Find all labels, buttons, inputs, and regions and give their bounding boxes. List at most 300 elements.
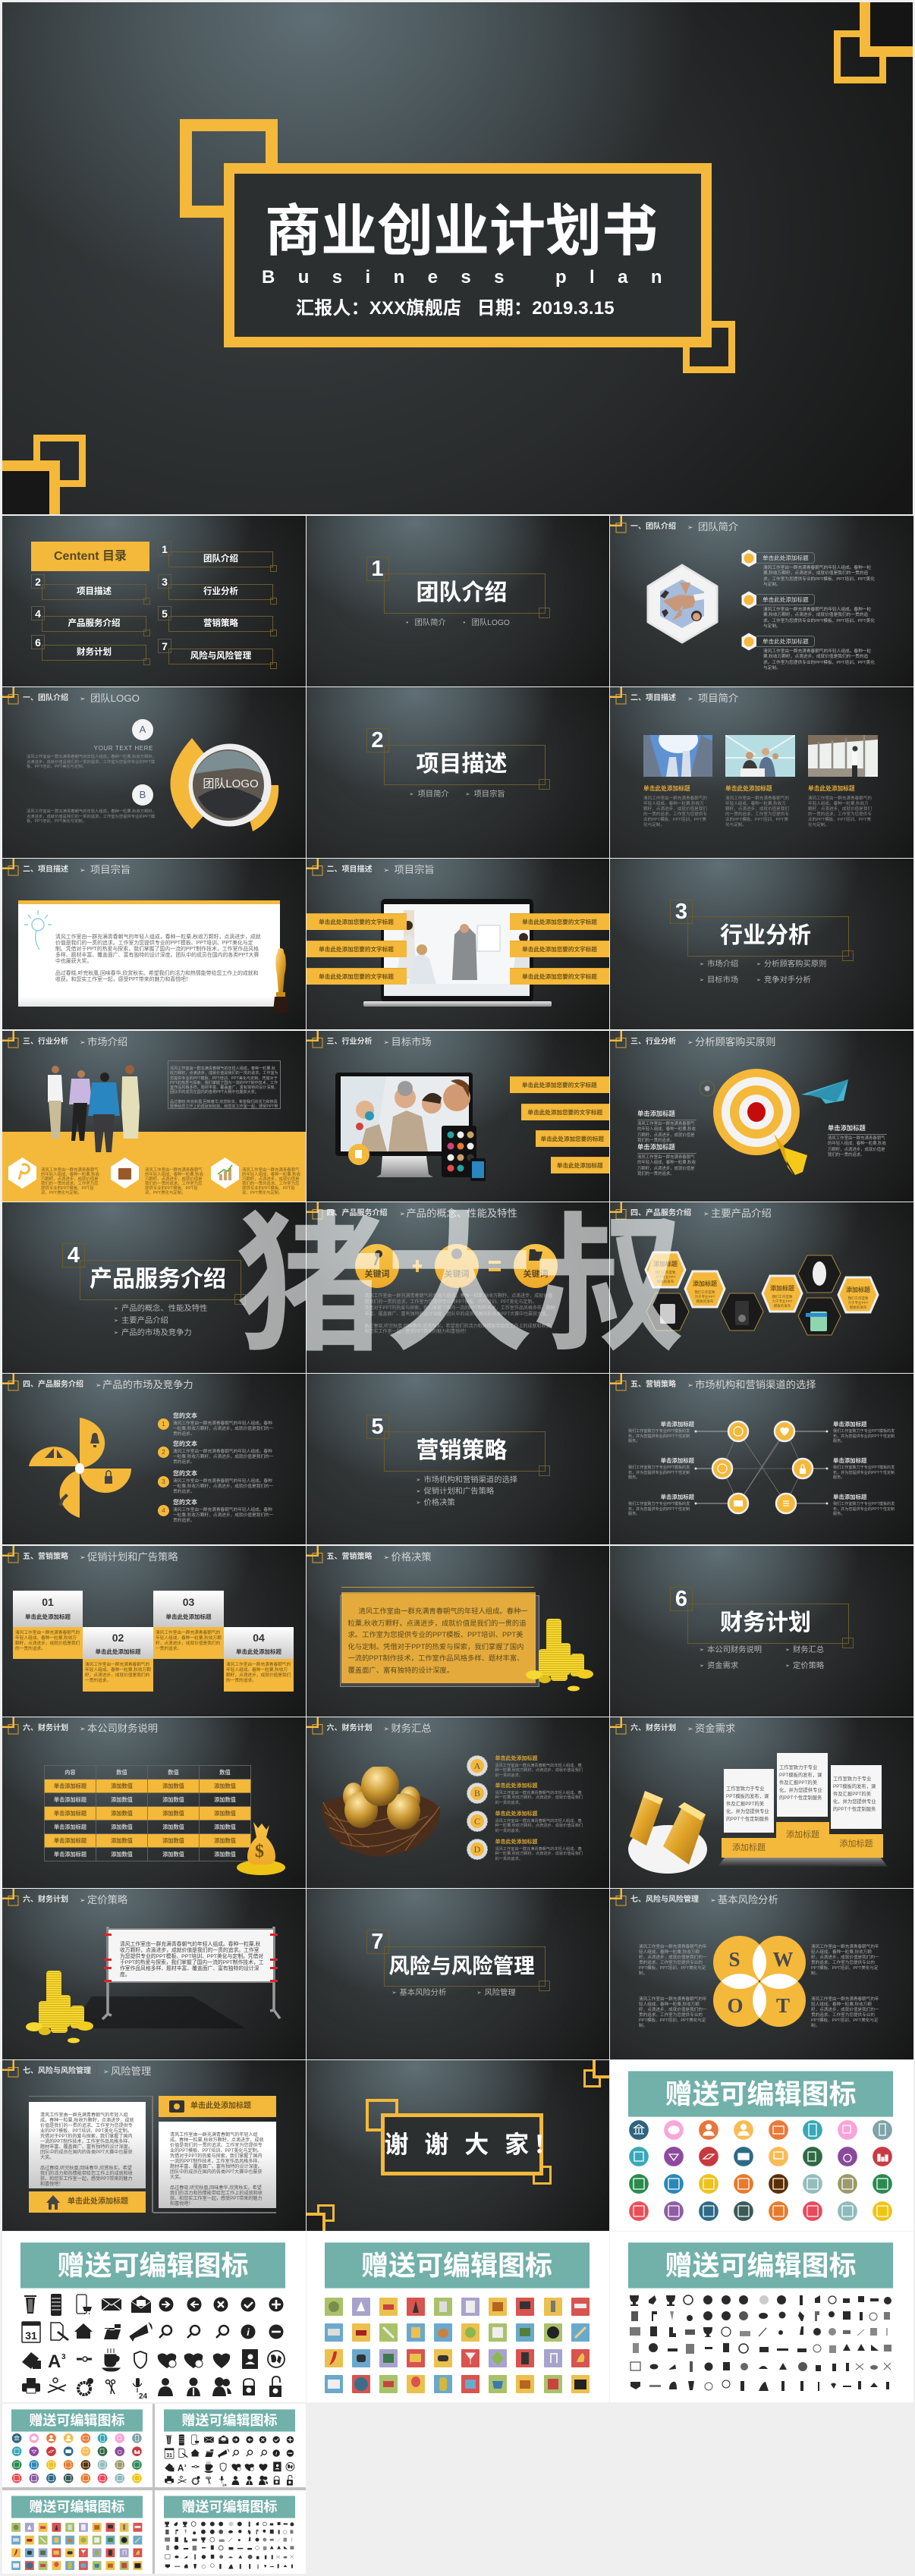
step 01: 01: [42, 1596, 54, 1608]
header: 二、项目描述: [326, 865, 372, 874]
text block A: 清风工作室由一群充满青春朝气的年轻人组成，春种一粒粟,秋收万颗籽，点滴进步，成就价值是我们的一贯的追求。工作室为您提供专业的PPT模板、PPT培训、PPT美化与定制。: [27, 755, 156, 769]
slide: section 7: ➢: [476, 1990, 481, 1996]
section item: 产品的市场及竞争力: [121, 1329, 192, 1337]
section number: 1: [371, 557, 384, 581]
label left 3: [628, 1494, 694, 1515]
podium right: [829, 1834, 883, 1858]
contents item 4: 产品服务介绍: [68, 619, 120, 628]
header: ➢: [687, 695, 693, 702]
header: 价格决策: [391, 1551, 432, 1563]
round icon grid: [610, 2060, 913, 2231]
header: 风险管理: [111, 2066, 151, 2077]
header: 七、风险与风险管理: [630, 1896, 699, 1904]
network diagram: [693, 1415, 838, 1518]
section item: 项目简介: [417, 790, 449, 799]
icon hexagon 3: [211, 1158, 239, 1189]
step 03: [153, 1591, 224, 1659]
slide: section 1: [307, 516, 609, 686]
text block right: [828, 1124, 888, 1154]
slide: swot: [610, 1889, 913, 2059]
contents item 6: [31, 635, 150, 665]
english subtitle: Business plan: [262, 267, 685, 287]
column 3: 清风工作室由一群充满青春朝气的年轻人组成。春种一粒粟,秋收万颗籽，点滴进步，成就价值是我们的一贯的追求。工作室为您提供专业的PPT模板、PPT培训、PPT美化与定制。: [808, 796, 872, 828]
header: 六、财务计划: [630, 1724, 676, 1733]
section corner square: [539, 1465, 549, 1476]
banner: 赠送可编辑图标: [182, 2413, 278, 2428]
label bar left 1: 单击此处添加您要的文字标题: [319, 919, 394, 925]
tagline: YOUR TEXT HERE: [94, 745, 153, 752]
item 3: [742, 633, 875, 671]
section number: [366, 557, 388, 581]
item 1: 单击此处添加标题: [762, 554, 809, 561]
finance table: 数值: [116, 1769, 127, 1775]
header: [307, 1202, 504, 1222]
section item: 本公司财务说明: [707, 1646, 762, 1654]
header: [610, 516, 738, 533]
decorative frame: back square: [180, 119, 278, 218]
item C: [466, 1811, 587, 1838]
label bar right 2: 单击此处添加您要的文字标题: [522, 946, 597, 953]
label bar right 3: [510, 968, 610, 985]
slide: section 6: [610, 1546, 913, 1716]
section frame: [687, 1604, 849, 1644]
slide: contents: [2, 516, 305, 686]
left yellow title: 单击此处添加标题: [68, 2197, 128, 2206]
item 1: [742, 549, 875, 587]
item 3: 3: [162, 1478, 165, 1485]
photo: meeting: [725, 735, 795, 777]
header: [2, 1546, 200, 1566]
text block right: 清风工作室由一群充满青春朝气的年轻人组成，春种一粒粟,秋收万颗籽，点滴进步，成就价值是我们的一贯的追求。: [828, 1136, 886, 1158]
item D: 单击此处添加标题: [495, 1839, 537, 1845]
item 2: 您的文本: [173, 1440, 197, 1447]
S text: 清风工作室由一群充满青春朝气的年轻人组成。春种一粒粟,秋收万颗籽，点滴进步，成就价值是我们的一贯的追求。工作室为您提供专业的PPT模板、PPT培训、PPT美化与定制。: [639, 1945, 707, 1976]
label left 2: [628, 1457, 694, 1478]
header: 分析顾客购买原则: [695, 1036, 775, 1048]
hexagon product grid: 我们工作室致: [656, 1270, 676, 1275]
label bar 3: 单击此处添加您要的标题: [540, 1136, 604, 1142]
right yellow title: [159, 2096, 276, 2117]
section item: 资金需求: [707, 1662, 738, 1670]
step 01: 清风工作室由一群充满青春朝气的年轻人组成。春种一粒粟,秋收万颗籽，点滴进步，成就价值是我们的一贯的追求。: [15, 1631, 80, 1651]
paper 1: 工作室致力于专业PPT模板的发布，课件及汇报PPT的美化，并为您提供专业的PPT个性定制服务: [726, 1786, 769, 1822]
hexagon product grid: 模板的发布: [774, 1303, 791, 1308]
finance table: 单击添加标题: [54, 1851, 86, 1857]
step 03: 03: [183, 1596, 194, 1608]
section number: [670, 900, 693, 924]
logo circle with crescents: [165, 733, 283, 835]
contents item 1: 1: [162, 543, 168, 555]
item A: [466, 1755, 587, 1783]
banner: [628, 2071, 893, 2117]
slide: square icons: [307, 2232, 609, 2402]
header: ➢: [80, 1896, 86, 1904]
section number: [366, 1415, 388, 1439]
slide: thank you: [307, 2060, 609, 2230]
step 02: [83, 1627, 153, 1692]
hexagon product grid: 我们工作室致: [848, 1296, 869, 1301]
header: 二、项目描述: [23, 865, 68, 874]
section frame: [687, 916, 849, 957]
slide: sport icons: [610, 2232, 913, 2402]
badge B: [132, 784, 153, 806]
keyword equation: 关键词: [444, 1268, 469, 1279]
paper 3: 工作室致力于专业PPT模板的发布，课件及汇报PPT的美化，并为您提供专业的PPT个性定制服务: [833, 1776, 876, 1812]
finance table: 单击添加标题: [54, 1824, 86, 1830]
header: [610, 1889, 807, 1908]
section number: 3: [675, 900, 687, 924]
step 01: [13, 1591, 83, 1659]
item C: C: [473, 1816, 480, 1827]
label bar 1: [510, 1076, 609, 1093]
section title: 团队介绍: [416, 580, 507, 605]
contents heading: Centent 目录: [54, 550, 127, 563]
slide: section 4: ➢: [114, 1330, 118, 1336]
header: ➢: [399, 1210, 405, 1217]
slide: section 5: ➢: [416, 1478, 420, 1483]
finance table: 添加数值: [111, 1810, 133, 1816]
sport icon grid: [610, 2232, 913, 2402]
header: 一、团队介绍: [630, 523, 676, 531]
finance table: 添加数值: [111, 1796, 133, 1802]
label bar 4: [551, 1157, 609, 1173]
step 02: 单击此处添加标题: [96, 1648, 141, 1655]
header: [610, 1717, 807, 1737]
header: ➢: [703, 1210, 709, 1217]
step 04: 04: [253, 1632, 265, 1644]
header: 五、营销策略: [630, 1381, 676, 1389]
header: [307, 859, 504, 878]
caption 1: 清风工作室由一群充满青春朝气的年轻人组成，春种一粒粟,秋收万颗籽，点滴进步，成就价值是我们的一贯的追求。工作室为您提供专业的PPT模板、PPT培训、PPT美化与定制。: [41, 1168, 99, 1195]
swot diagram: [709, 1930, 811, 2033]
hexagon team photo: [646, 564, 718, 643]
header: [2, 859, 200, 878]
section item: 项目宗旨: [473, 790, 505, 799]
contents item 5: 营销策略: [203, 619, 238, 628]
slide: project purpose text: [2, 859, 305, 1029]
finance table: 添加数值: [162, 1783, 184, 1789]
banner: 赠送可编辑图标: [29, 2499, 124, 2515]
section item: 定价策略: [793, 1662, 824, 1670]
swot diagram: O: [727, 1994, 744, 2017]
section corner square: [539, 1981, 549, 1991]
label bar 3: [536, 1130, 609, 1147]
header: [307, 1717, 504, 1737]
icon hexagon 1: [8, 1158, 36, 1189]
section item: 团队简介: [414, 619, 446, 627]
bracket line lower: [153, 2212, 276, 2213]
step 02: 清风工作室由一群充满青春朝气的年轻人组成。春种一粒粟,秋收万颗籽，点滴进步，成就价值是我们的一贯的追求。: [85, 1663, 151, 1683]
contents item 7: 风险与风险管理: [190, 652, 251, 661]
contents item 1: [158, 542, 277, 572]
finance table: 添加数值: [162, 1837, 184, 1843]
section item: 财务汇总: [793, 1646, 824, 1654]
keyword equation: 关键词: [364, 1268, 389, 1279]
section number: 2: [371, 728, 384, 752]
section item: 团队LOGO: [472, 619, 510, 627]
section title: 财务计划: [720, 1610, 811, 1635]
bulb icon: [24, 910, 52, 951]
header: 四、产品服务介绍: [630, 1209, 691, 1217]
paper 2: [777, 1753, 828, 1817]
slide: section 6: ➢: [700, 1648, 704, 1653]
header: [610, 1202, 807, 1222]
top right corner bracket: [860, 0, 913, 57]
section number: [366, 728, 388, 752]
keyword equation: 关键词: [523, 1268, 548, 1279]
corner square bottom left: [317, 2204, 334, 2222]
header: ➢: [80, 695, 86, 702]
hexagon product grid: 模板的发布: [657, 1279, 674, 1284]
contents item 3: [158, 574, 277, 605]
finance table: 添加数值: [111, 1824, 133, 1830]
contents item 2: 2: [35, 576, 41, 588]
header: 一、团队介绍: [23, 694, 68, 702]
item 2: 清风工作室由一群充满青春朝气的年轻人组成。春种一粒粟,秋收万颗籽，点滴进步，成就价值是我们的一贯的追求。工作室为您提供专业的PPT模板、PPT培训、PPT美化与定制。: [763, 608, 875, 629]
small panel: black icons: [155, 2404, 305, 2487]
slide: section 6: ➢: [700, 1663, 704, 1669]
cover slide: [2, 2, 913, 514]
finance table: 添加数值: [214, 1810, 236, 1816]
text block left 1: [637, 1110, 698, 1140]
left yellow title: [29, 2191, 146, 2213]
header: 四、产品服务介绍: [326, 1209, 387, 1217]
column 3: [808, 785, 878, 831]
hexagon product grid: 模板的发布: [696, 1299, 714, 1304]
header: ➢: [687, 523, 693, 531]
label left 1: 我们工作室致力于专业PPT模板的发布，并为您提供专业的PPT个性定制服务。: [628, 1429, 690, 1444]
hexagon product grid: 我们工作室致: [772, 1294, 793, 1299]
slide: section 2: [307, 687, 609, 857]
section number: [62, 1243, 85, 1268]
header: [307, 1031, 504, 1051]
slide: pricing decision: [307, 1546, 609, 1716]
text box: 清风工作室由一群充满青春朝气的年轻人组成，春种一粒粟,秋收万颗籽，点滴进步，成就价值是我们的一贯的追求。工作室为您提供专业的PPT模板、PPT培训、PPT美化与定制。凭借对于PPT的热爱与探索，我们掌握了国内一流的PPT制作技术，工作室作品风格多样、题材丰富、覆盖面广、富有独特的设计深度。团队中的成员在国内的各类PPT大赛中也屡获大奖。: [170, 1067, 278, 1095]
text block left 1: 单击添加标题: [637, 1110, 675, 1117]
corner square top right: [583, 2069, 601, 2088]
header: 资金需求: [695, 1723, 735, 1734]
left text card: 品过春晓,听完秋凰,回味春华,欣赏秋实。希望我们的活力和热情能带给您工作上的成就和收获。和您实工作室一起，感受PPT带来的魅力和喜悦吧！: [40, 2166, 133, 2187]
item A: A: [473, 1761, 480, 1771]
thank you frame: [381, 2113, 543, 2175]
contents item 6: 财务计划: [77, 648, 112, 657]
monitor with photo and devices: [334, 1071, 489, 1183]
text box: [168, 1060, 281, 1109]
people illustration: [44, 1064, 140, 1155]
contents item 5: 5: [162, 608, 168, 620]
text block left 2: 清风工作室由一群充满青春朝气的年轻人组成，春种一粒粟,秋收万颗籽，点滴进步，成就价值是我们的一贯的追求。: [637, 1155, 696, 1176]
small panel: sport icons: [155, 2490, 305, 2574]
slide: project purpose laptop: [307, 859, 609, 1029]
contents item 6: 6: [35, 636, 41, 649]
badge A: [132, 719, 153, 740]
header: 七、风险与风险管理: [23, 2067, 91, 2075]
small panel: round icons: [2, 2404, 152, 2487]
section frame: [384, 573, 545, 614]
finance table: 内容: [64, 1769, 76, 1775]
finance table: 单击添加标题: [54, 1783, 86, 1789]
header: ➢: [687, 1038, 693, 1046]
section item: 促销计划和广告策略: [423, 1487, 494, 1496]
item 2: [742, 592, 875, 629]
badge A: A: [140, 724, 146, 735]
W text: 清风工作室由一群充满青春朝气的年轻人组成。春种一粒粟,秋收万颗籽，点滴进步，成就价值是我们的一贯的追求。工作室为您提供专业的PPT模板、PPT培训、PPT美化与定制。: [811, 1945, 879, 1976]
item C: 清风工作室由一群充满青春朝气的年轻人组成。春种一粒粟,秋收万颗籽，点滴进步，成就价值是我们的一贯的追求。: [495, 1819, 583, 1833]
header: ➢: [80, 866, 86, 874]
slide: section 7: ➢: [391, 1990, 396, 1996]
column 3: 单击此处添加标题: [808, 785, 855, 792]
finance table: 添加数值: [214, 1851, 236, 1857]
item 2: 单击此处添加标题: [762, 596, 809, 603]
section number: 7: [371, 1930, 384, 1954]
item A: 单击此处添加标题: [495, 1756, 537, 1761]
label bar 2: [520, 1104, 609, 1120]
keyword equation: [352, 1240, 564, 1292]
section corner square: [842, 1638, 854, 1648]
label bar right 3: 单击此处添加您要的文字标题: [522, 973, 597, 980]
header: 六、财务计划: [23, 1724, 68, 1733]
label bar 2: 单击此处添加您要的文字标题: [527, 1109, 602, 1116]
header: [610, 1374, 807, 1393]
label bar left 3: [307, 968, 407, 985]
slide: main products: [610, 1202, 913, 1373]
item B: B: [473, 1788, 480, 1798]
item 1: 清风工作室由一群充满青春朝气的年轻人组成。春种一粒粟,秋收万颗籽，点滴进步，成就价值是我们的一贯的追求。工作室为您提供专业的PPT模板、PPT培训、PPT美化与定制。: [763, 566, 875, 587]
label right 3: 单击添加标题: [833, 1494, 866, 1500]
section item: 风险管理: [484, 1989, 516, 1997]
slide: section 7: [307, 1889, 609, 2059]
back square: [366, 2099, 398, 2131]
label right 2: [833, 1457, 899, 1478]
slide: section 3: ➢: [700, 962, 704, 967]
left text card: 清风工作室由一群充满青春朝气的年轻人组成。春种一粒粟,秋收万颗籽，点滴进步，成就价值是我们的一贯的追求。工作室为您提供专业的PPT模板、PPT培训、PPT美化与定制。凭借对于PPT的热爱与探索，我们掌握了国内一流的PPT制作技术，工作室作品风格多样、题材丰富、覆盖面广、富有独特的设计深度。团队中的成员在国内的各类PPT大赛中也屡获大奖。: [40, 2113, 134, 2160]
text block right: 单击添加标题: [828, 1124, 866, 1132]
hexagon product grid: 添加标题: [653, 1260, 678, 1268]
header: 项目宗旨: [395, 864, 435, 875]
target with darts: [697, 1067, 853, 1177]
contents heading: [31, 542, 149, 571]
item C: 单击此处添加标题: [495, 1811, 537, 1817]
header: ➢: [384, 1725, 389, 1733]
label right 2: 我们工作室致力于专业PPT模板的发布，并为您提供专业的PPT个性定制服务。: [833, 1465, 895, 1480]
banner: 赠送可编辑图标: [665, 2250, 856, 2281]
slide: section 1: •: [463, 620, 465, 626]
label left 1: [628, 1421, 694, 1442]
banner: [164, 2496, 295, 2518]
banner: [11, 2496, 143, 2518]
column 2: 单击此处添加标题: [725, 785, 772, 792]
item 1: [158, 1412, 275, 1440]
yellow text panel: 清风工作室由一群充满青春朝气的年轻人组成。春种一粒粟,秋收万颗籽，点滴进步，成就价值是我们的一贯的追求。工作室为您提供专业的PPT模板、PPT培训、PPT美化与定制。凭借对于PPT的热爱与探索，我们掌握了国内一流的PPT制作技术，工作室作品风格多样、题材丰富、覆盖面广、富有独特的设计深度。: [347, 1607, 528, 1674]
section item: 价格决策: [423, 1499, 455, 1507]
coin pile: [24, 1971, 94, 2044]
label right 3: [833, 1494, 899, 1515]
header: 六、财务计划: [23, 1896, 68, 1904]
item 4: [158, 1499, 275, 1526]
section item: 市场机构和营销渠道的选择: [423, 1476, 517, 1484]
header: 三、行业分析: [630, 1038, 676, 1046]
slide: round icons: [610, 2060, 913, 2230]
contents item 5: [158, 606, 277, 636]
hexagon product grid: [640, 1248, 883, 1339]
label bar left 1: [307, 913, 407, 930]
header: 五、营销策略: [326, 1553, 372, 1561]
contents item 1: 团队介绍: [203, 554, 238, 564]
icon grid: [2, 2404, 152, 2488]
money bag: [232, 1822, 293, 1877]
presenter and date: 汇报人：XXX旗舰店 日期：2019.3.15: [296, 298, 615, 319]
finance table: 数值: [168, 1769, 179, 1775]
swot diagram: T: [776, 1994, 790, 2017]
slide: market channels: [610, 1374, 913, 1544]
caption 2: 清风工作室由一群充满青春朝气的年轻人组成，春种一粒粟,秋收万颗籽，点滴进步，成就价值是我们的一贯的追求。工作室为您提供专业的PPT模板、PPT培训、PPT美化与定制。: [145, 1168, 203, 1195]
body text: 凭借对于PPT的热爱与探索，我们掌握了国内一流的PPT制作技术，工作室作品风格多样、题材丰富、覆盖面广、富有独特的设计深度。团队中的成员在国内的各类PPT大赛中也屡获大奖。: [364, 1306, 555, 1317]
paper 3: [831, 1765, 882, 1829]
label right 3: 我们工作室致力于专业PPT模板的发布，并为您提供专业的PPT个性定制服务。: [833, 1502, 895, 1516]
section corner square: [234, 1294, 246, 1305]
paper 1: [724, 1769, 774, 1833]
finance table: 添加数值: [214, 1783, 236, 1789]
thank you frame: 谢 谢 大 家！: [384, 2131, 562, 2158]
contents item 3: 行业分析: [203, 587, 238, 596]
finance table: 添加数值: [111, 1783, 133, 1789]
podium left: 添加标题: [732, 1843, 766, 1852]
contents item 4: 4: [35, 608, 41, 620]
header: 五、营销策略: [23, 1553, 68, 1561]
header: 财务汇总: [391, 1723, 432, 1734]
header: [610, 687, 807, 707]
photo: window: [808, 735, 878, 777]
podium center: [776, 1822, 829, 1858]
step 04: 清风工作室由一群充满青春朝气的年轻人组成。春种一粒粟,秋收万颗籽，点滴进步，成就价值是我们的一贯的追求。: [226, 1663, 291, 1683]
contents item 7: [158, 639, 277, 669]
header: 市场机构和营销渠道的选择: [695, 1379, 816, 1390]
yellow text panel: [341, 1592, 536, 1683]
section title: 项目描述: [416, 752, 507, 777]
slide: section 2: ➢: [466, 792, 470, 797]
header: ➢: [687, 1381, 693, 1389]
panel text: 清风工作室由一群充满青春朝气的年轻人组成，春种一粒粟,秋收万颗籽，点滴进步，成就价值是我们的一贯的追求。工作室为您提供专业的PPT模板、PPT培训、PPT美化与定制。凭借对于PPT的热爱与探索，我们掌握了国内一流的PPT制作技术，工作室作品风格多样、题材丰富、覆盖面广、富有独特的设计深度。团队中的成员在国内的各类PPT大赛中也屡获大奖。: [55, 935, 261, 964]
corner bracket top right: [592, 2059, 610, 2078]
slide: section 4: ➢: [114, 1318, 118, 1324]
body text: 清风工作室由一群充满青春朝气的年轻人组成。春种一粒粟,秋收万颗籽，点滴进步，成就价值是我们的一贯的追求。工作室为您提供专业的PPT模板、PPT培训、PPT美化与定制。: [364, 1294, 552, 1305]
whiteboard text: 清风工作室由一群充满青春朝气的年轻人组成。春种一粒粟,秋收万颗籽，点滴进步，成就价值是我们的一贯的追求。工作室为您提供专业的PPT模板、PPT培训、PPT美化与定制。凭借对于PPT的热爱与探索，我们掌握了国内一流的PPT制作技术，工作室作品风格多样、题材丰富、覆盖面广、富有独特的设计深度。: [120, 1942, 264, 1978]
item B: 单击此处添加标题: [495, 1783, 537, 1789]
logo text: 团队LOGO: [203, 778, 259, 790]
label bar right 2: [510, 941, 610, 957]
decorative frame: bottom left square: [33, 435, 86, 487]
banner: 赠送可编辑图标: [665, 2078, 856, 2109]
icon grid: [2, 2490, 152, 2574]
section frame: [384, 745, 545, 785]
banner: [164, 2409, 295, 2432]
header: ➢: [80, 1725, 86, 1733]
banner: 赠送可编辑图标: [182, 2499, 278, 2515]
item 3: 您的文本: [173, 1470, 197, 1477]
section corner square: [539, 779, 549, 790]
T text: 清风工作室由一群充满青春朝气的年轻人组成。春种一粒粟,秋收万颗籽，点滴进步，成就价值是我们的一贯的追求。工作室为您提供专业的PPT模板、PPT培训、PPT美化与定制。: [811, 1997, 879, 2028]
section title: 行业分析: [720, 923, 811, 948]
slide: pricing strategy: [2, 1889, 305, 2059]
section item: 目标市场: [707, 976, 738, 985]
icon grid: [155, 2404, 305, 2488]
trophy statue: [270, 948, 291, 1013]
section item: 主要产品介绍: [121, 1317, 168, 1325]
slide: funding needs: [610, 1717, 913, 1887]
finance table: 数值: [219, 1769, 231, 1775]
label right 1: 单击添加标题: [833, 1421, 866, 1428]
item 1: 清风工作室由一群充满青春朝气的年轻人组成。春种一粒粟,秋收万颗籽，点滴进步，成就价值是我们的一贯的追求。: [173, 1422, 273, 1437]
